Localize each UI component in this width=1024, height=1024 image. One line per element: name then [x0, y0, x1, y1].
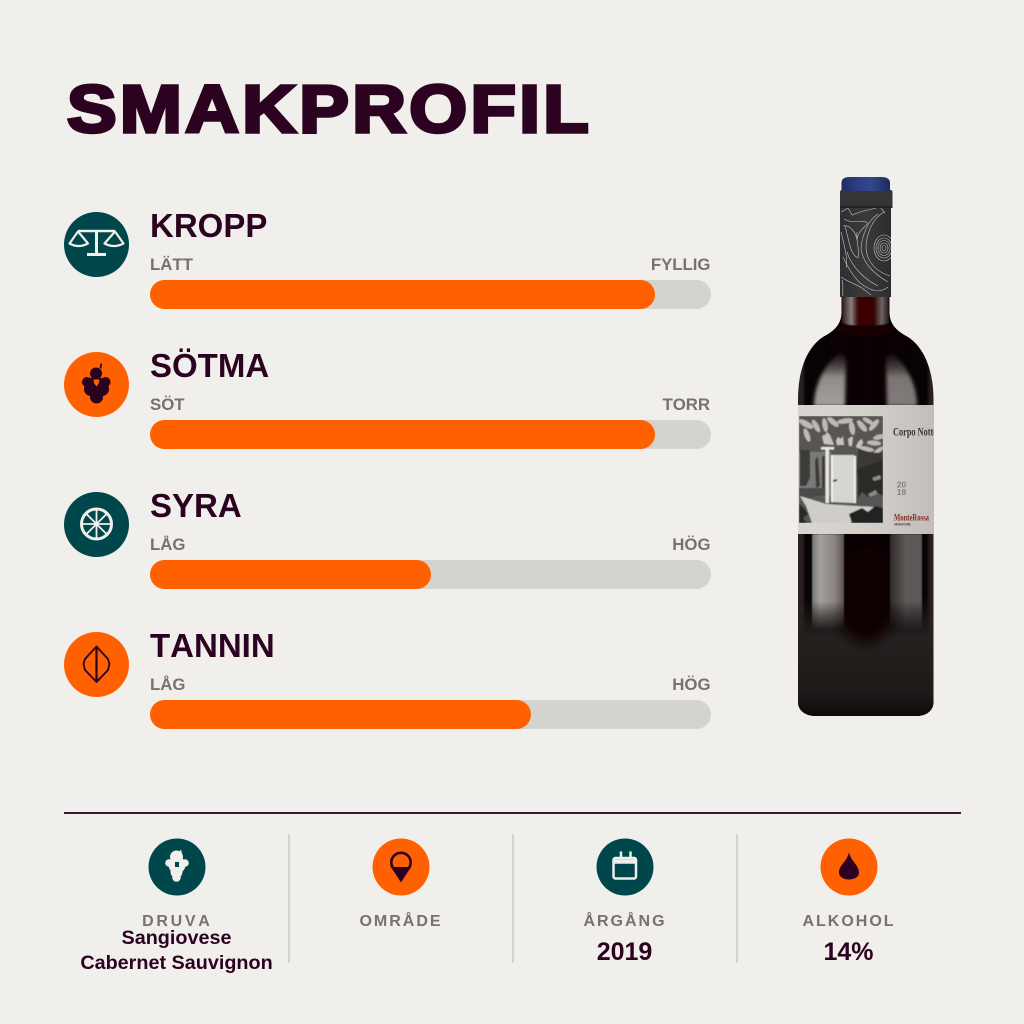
label: låg: LÅG — [150, 535, 185, 554]
separator — [736, 834, 738, 963]
icon: calendar — [596, 838, 654, 896]
bottle glass — [796, 288, 936, 718]
icon: map pin — [372, 838, 430, 896]
label text: vintage: 20 — [897, 480, 906, 490]
icon: scales — [64, 212, 129, 277]
separator — [288, 834, 290, 963]
value: 2019: 2019 — [597, 938, 652, 966]
label: hög: HÖG — [672, 535, 710, 554]
label: torr: TORR — [662, 395, 710, 414]
panel: sötma — [64, 347, 711, 449]
panel: syra — [64, 487, 711, 589]
icon: grapes — [64, 352, 129, 417]
bar: kropp — [150, 280, 711, 309]
icon: citrus wheel — [64, 492, 129, 557]
bar: tannin — [150, 700, 711, 729]
icon: leaf — [64, 632, 129, 697]
label: låg: LÅG — [150, 675, 185, 694]
value: grapes: Sangiovese — [122, 927, 231, 949]
heading: sötma: SÖTMA — [150, 347, 269, 384]
capsule with contour lines — [840, 177, 894, 297]
value: grapes: Cabernet Sauvignon — [80, 952, 273, 974]
caption: druva: DRUVA — [142, 913, 213, 930]
panel: tannin — [64, 627, 711, 729]
panel: område — [359, 838, 443, 930]
label: söt: SÖT — [150, 395, 184, 414]
label text: producer: MonteRossa — [894, 512, 929, 522]
caption: årgång: ÅRGÅNG — [583, 913, 667, 930]
caption: område: OMRÅDE — [359, 913, 443, 930]
label text: signature: SIGNATURE — [894, 522, 912, 526]
heading: kropp: KROPP — [150, 207, 267, 244]
label text: vintage — [897, 482, 906, 495]
label text: vintage: 19 — [897, 487, 906, 497]
label: lätt: LÄTT — [150, 255, 193, 274]
value: grapes — [80, 927, 273, 974]
label: hög: HÖG — [672, 675, 710, 694]
bar: sötma — [150, 420, 711, 449]
panel: alkohol — [802, 838, 896, 966]
heading: syra: SYRA — [150, 487, 242, 524]
panel: druva — [80, 838, 273, 974]
caption: alkohol: ALKOHOL — [802, 913, 896, 930]
bottle label — [798, 405, 937, 534]
value: 14%: 14% — [823, 938, 874, 966]
divider line — [64, 812, 961, 814]
icon: grape white — [148, 838, 206, 896]
separator — [512, 834, 514, 963]
wine bottle — [798, 177, 934, 716]
bar: syra — [150, 560, 711, 589]
panel: kropp — [64, 207, 711, 309]
icon: drop — [820, 838, 878, 896]
heading: tannin: TANNIN — [150, 627, 275, 664]
label: fyllig: FYLLIG — [651, 255, 710, 274]
label illustration — [798, 416, 885, 523]
title: SMAKPROFIL — [66, 72, 591, 147]
panel: årgång — [583, 838, 667, 966]
